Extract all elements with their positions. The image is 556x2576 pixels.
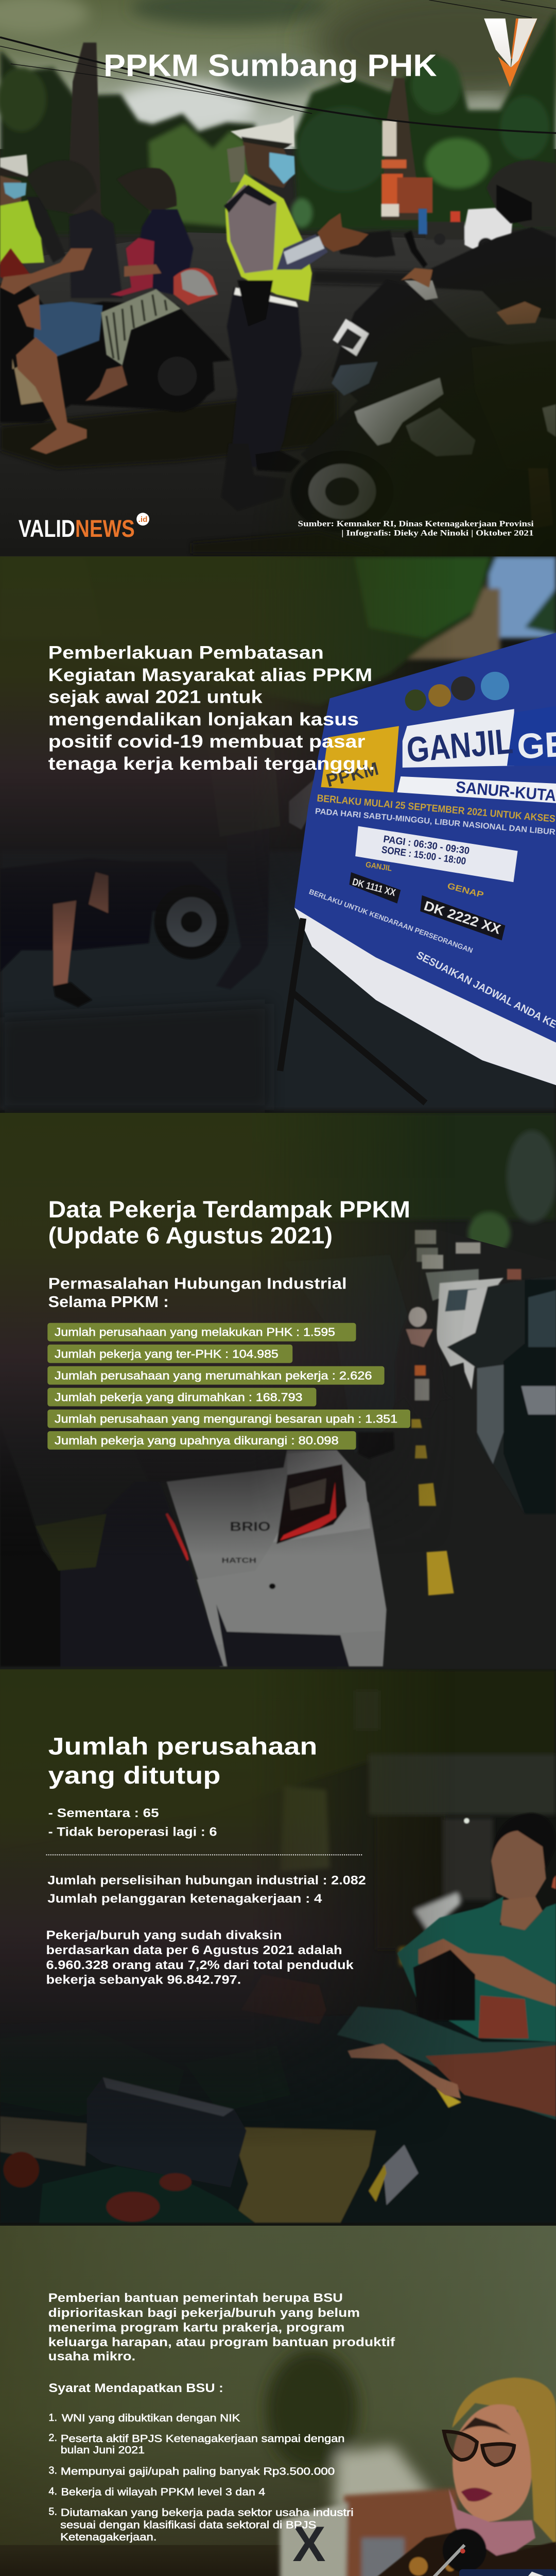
- road: [0, 232, 483, 556]
- bar: companies cutting wages: Jumlah perusahaan yang mengurangi besaran upah : 1.351: [55, 1412, 397, 1425]
- panel: PPKM introduction: [0, 556, 556, 1113]
- logo: VALIDNEWS.id: .id: [138, 515, 148, 524]
- panel: affected worker data: [0, 1113, 556, 1669]
- disputes text: Jumlah perselisihan hubungan industrial : 2.082: [47, 1873, 366, 1887]
- requirements list: [48, 2412, 354, 2543]
- disputes text: [47, 1873, 366, 1906]
- intro paragraph: [48, 642, 375, 774]
- blurred background figure: [266, 2350, 432, 2524]
- microphone: [333, 2545, 465, 2576]
- assistance paragraph: [48, 2291, 395, 2364]
- bar: workers with wage cuts: [47, 1431, 356, 1450]
- requirements list: WNI yang dibuktikan dengan NIK: [62, 2413, 240, 2424]
- silver car: BRIO: [230, 1520, 271, 1534]
- intro paragraph: tenaga kerja kembali terganggu.: [48, 754, 375, 774]
- title: PPKM Sumbang PHK: [103, 47, 437, 82]
- bar: companies with layoffs: Jumlah perusahaan yang melakukan PHK : 1.595: [55, 1326, 335, 1338]
- source credit: Sumber: Kemnaker RI, Dinas Ketenagakerjaan Provinsi: [298, 519, 534, 528]
- road shadows: [0, 269, 461, 553]
- left overlay: [0, 1113, 556, 1556]
- lamp light: [464, 1818, 470, 1824]
- section heading: [48, 1733, 317, 1789]
- bar: companies with layoffs: [47, 1323, 356, 1342]
- closure list: - Tidak beroperasi lagi : 6: [48, 1825, 217, 1839]
- street background: [0, 556, 556, 1110]
- banner stand: [280, 919, 426, 1103]
- motorcycle rider in traffic: [395, 1307, 452, 1418]
- police officer: [221, 115, 369, 510]
- banner: PPKM: [324, 758, 380, 791]
- section heading: Data Pekerja Terdampak PPKM: [48, 1196, 410, 1223]
- requirements list: 4.: [48, 2486, 57, 2497]
- requirements list: Diutamakan yang bekerja pada sektor usaha industri: [61, 2507, 354, 2518]
- sky: [0, 0, 556, 149]
- tree canopy: [0, 1113, 556, 1255]
- assistance paragraph: menerima program kartu prakerja, program: [48, 2320, 344, 2334]
- banner: DK 1111 XX: [351, 877, 397, 899]
- panel: closed companies: [0, 1669, 556, 2226]
- dark SUV foreground: [0, 1425, 394, 1666]
- section heading: (Update 6 Agustus 2021): [48, 1222, 333, 1248]
- vaccination paragraph: [46, 1928, 354, 1987]
- banner: GENAP: [446, 881, 485, 900]
- motorcycle right: [291, 231, 556, 532]
- assistance paragraph: usaha mikro.: [48, 2350, 135, 2364]
- motorcycle left: [0, 248, 231, 422]
- banner: SORE : 15:00 - 18:00: [381, 844, 466, 867]
- section heading: Jumlah perusahaan: [48, 1733, 317, 1759]
- left policeman: [0, 155, 65, 264]
- vaccination paragraph: 6.960.328 orang atau 7,2% dari total penduduk: [46, 1958, 354, 1972]
- banner: GANJIL: [405, 721, 514, 770]
- vaccination paragraph: Pekerja/buruh yang sudah divaksin: [46, 1928, 282, 1942]
- bar: workers furloughed: Jumlah pekerja yang dirumahkan : 168.793: [55, 1391, 303, 1403]
- bottom-right corner fade: [0, 0, 556, 556]
- requirements list: 1.: [48, 2412, 57, 2424]
- rider two with child: [85, 168, 218, 401]
- intro paragraph: Kegiatan Masyarakat alias PPKM: [48, 665, 372, 685]
- requirements list: 2.: [48, 2432, 57, 2444]
- right rider: [401, 160, 556, 529]
- banner: [294, 633, 556, 1085]
- assistance paragraph: diprioritaskan bagi pekerja/buruh yang belum: [48, 2306, 360, 2320]
- vaccination paragraph: berdasarkan data per 6 Agustus 2021 adalah: [46, 1943, 342, 1957]
- data bars: [47, 1323, 410, 1450]
- closure list: [48, 1806, 217, 1839]
- bar: workers laid off: Jumlah pekerja yang ter-PHK : 104.985: [55, 1347, 279, 1360]
- intro paragraph: mengendalikan lonjakan kasus: [48, 709, 359, 730]
- road: [337, 1226, 556, 1669]
- section heading: yang ditutup: [48, 1762, 220, 1789]
- bar: workers furloughed: [47, 1388, 316, 1406]
- road shadow band: [0, 1004, 269, 1110]
- section heading: [48, 1196, 410, 1248]
- banner: PAGI : 06:30 - 09:30: [383, 834, 470, 857]
- bar: companies furloughing: Jumlah perusahaan yang merumahkan pekerja : 2.626: [55, 1369, 372, 1382]
- vaccination paragraph: bekerja sebanyak 96.842.797.: [46, 1973, 241, 1987]
- desk background: [259, 2488, 458, 2576]
- requirements list: Mempunyai gaji/upah paling banyak Rp3.500.000: [61, 2466, 335, 2478]
- panel: hero photo with title: [0, 0, 556, 556]
- sub heading: Permasalahan Hubungan Industrial: [48, 1276, 347, 1293]
- banner: DK 2222 XX: [422, 898, 503, 937]
- bar: companies cutting wages: [47, 1410, 410, 1428]
- left overlay: [0, 1669, 556, 2148]
- banner: BERLAKU UNTUK KENDARAAN PERSEORANGAN: [308, 888, 474, 955]
- logo: VALIDNEWS.id: [19, 513, 149, 542]
- closure list: - Sementara : 65: [48, 1806, 159, 1820]
- minister: [264, 2378, 556, 2576]
- trees background: [0, 11, 556, 234]
- silver car: [135, 1450, 387, 1666]
- requirements list: Ketenagakerjaan.: [60, 2532, 157, 2543]
- logo: VALIDNEWS.id: VALID: [19, 515, 75, 542]
- room interior: [0, 1669, 556, 1965]
- requirements list: bulan Juni 2021: [61, 2445, 145, 2456]
- disputes text: Jumlah pelanggaran ketenagakerjaan : 4: [47, 1892, 322, 1906]
- silver car: HATCH: [221, 1556, 256, 1565]
- intro paragraph: sejak awal 2021 untuk: [48, 687, 263, 707]
- name plate letter: X: [292, 2517, 326, 2572]
- logo: VALIDNEWS.id: NEWS: [75, 515, 135, 542]
- requirements heading: Syarat Mendapatkan BSU :: [48, 2381, 223, 2395]
- bar: workers laid off: [47, 1345, 292, 1363]
- overhead wires: [0, 0, 556, 133]
- left temple gate: [70, 42, 103, 216]
- bar: companies furloughing: [47, 1366, 385, 1385]
- requirements list: 5.: [48, 2506, 57, 2517]
- assistance paragraph: keluarga harapan, atau program bantuan produktif: [48, 2335, 395, 2349]
- right temple gate: [381, 78, 432, 220]
- requirements list: sesuai dengan klasifikasi data sektoral di BPJS: [60, 2520, 316, 2531]
- left overlay: [0, 556, 556, 947]
- rider one: [0, 160, 123, 454]
- requirements list: Bekerja di wilayah PPKM level 3 dan 4: [61, 2486, 265, 2498]
- glasses: [444, 2431, 514, 2465]
- assistance paragraph: Pemberian bantuan pemerintah berupa BSU: [48, 2291, 343, 2305]
- bar: workers with wage cuts: Jumlah pekerja yang upahnya dikurangi : 80.098: [55, 1434, 339, 1447]
- banner: PADA HARI SABTU-MINGGU, LIBUR NASIONAL DAN LIBUR: [315, 807, 556, 837]
- floor and goods: [0, 1974, 556, 2223]
- scooter and people: [0, 734, 316, 1007]
- tablet and tissue box: [427, 2569, 556, 2576]
- source credit: [298, 519, 534, 537]
- sub heading: [48, 1276, 347, 1311]
- intro paragraph: positif covid-19 membuat pasar: [48, 732, 366, 752]
- intro paragraph: Pemberlakuan Pembatasan: [48, 642, 324, 663]
- sub heading: Selama PPKM :: [48, 1294, 169, 1311]
- banner: GANJIL: [365, 860, 392, 873]
- panel: BSU assistance: [0, 2226, 556, 2576]
- source credit: | Infografis: Dieky Ade Ninoki | Oktober 2021: [341, 529, 534, 537]
- requirements list: 3.: [48, 2465, 57, 2476]
- yellow lane markings: [411, 1419, 454, 1596]
- traffic queue: [284, 1230, 556, 1514]
- requirements list: Peserta aktif BPJS Ketenagakerjaan sampai dengan: [61, 2433, 344, 2445]
- logo: Valid mark: [484, 19, 537, 87]
- woman sewing: [337, 1813, 556, 2120]
- background vehicles: [339, 208, 512, 257]
